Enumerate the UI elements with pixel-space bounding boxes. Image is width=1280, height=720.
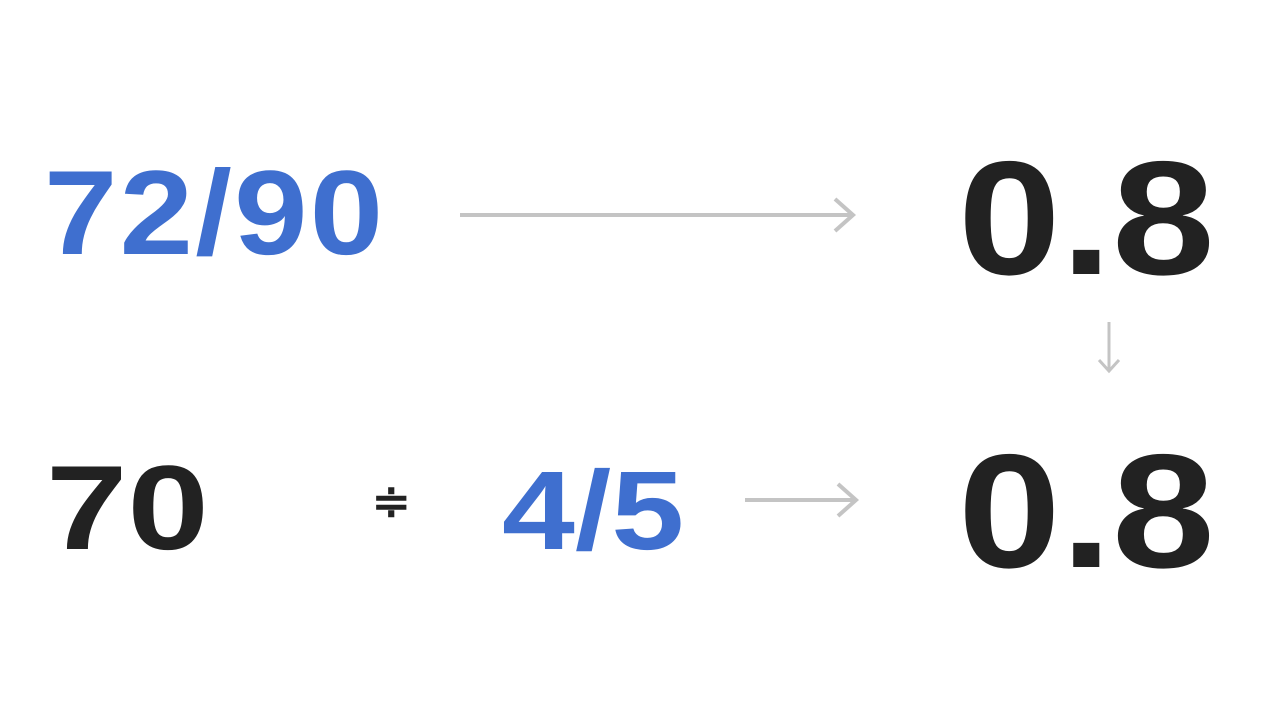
arrow: right top [460,198,856,232]
fraction 4/5: 4/5 [502,448,684,573]
fraction 72/90: 72/90 [44,146,385,280]
number 70: 70 [46,441,209,575]
result 0.8 top: 0.8 [958,128,1215,309]
symbol: approximately equal: ≑ [372,475,411,527]
arrow: right bottom [745,482,859,518]
arrow: down [1098,322,1120,373]
result 0.8 bottom: 0.8 [958,421,1215,602]
